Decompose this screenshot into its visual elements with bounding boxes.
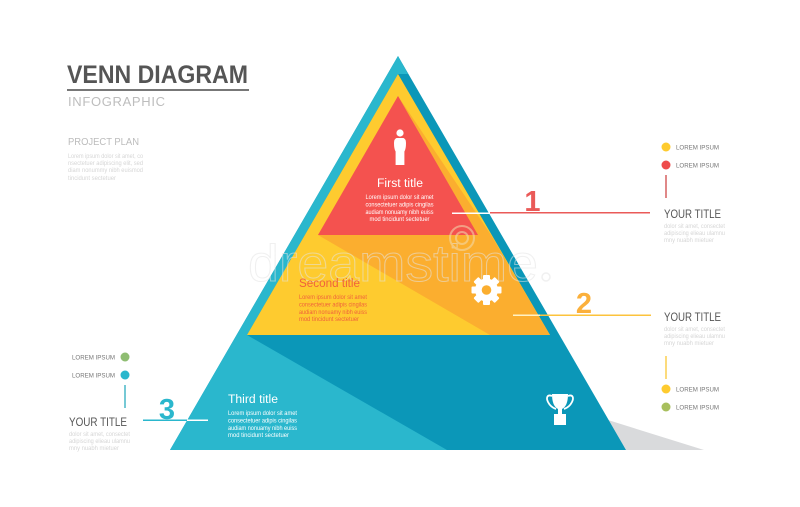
text block: your title 3: adipiscing elieau ulamnu: [69, 439, 130, 445]
text block: project plan: PROJECT PLAN: [68, 136, 139, 148]
legend: top right: LOREM IPSUM: [676, 144, 719, 152]
text block: your title 1: adipiscing elieau ulamnu: [664, 231, 725, 237]
subheading: Infographic: INFOGRAPHIC: [68, 94, 165, 109]
legend: left: [72, 352, 130, 408]
text block: second title: mod tincidunt sectetuer: [299, 317, 359, 323]
pyramid shadow: [608, 420, 704, 450]
text block: your title 1: YOUR TITLE: [664, 207, 721, 221]
icon: gear: [472, 275, 502, 305]
text block: first title: Lorem ipsum dolor sit amet: [366, 195, 434, 201]
text block: first title: [366, 178, 434, 223]
text block: third title: Third title: [228, 394, 278, 406]
text block: third title: [228, 394, 297, 439]
legend: top right: LOREM IPSUM: [676, 162, 719, 170]
legend: lower right: LOREM IPSUM: [676, 404, 719, 412]
callout 3: leader line and number: 3: [159, 394, 175, 426]
text block: your title 3: [69, 415, 130, 452]
text block: third title: Lorem ipsum dolor sit amet: [228, 411, 297, 417]
legend: top right: [662, 142, 719, 198]
text block: your title 1: dolor sit amet, consectet: [664, 224, 725, 230]
text block: third title: audiam nonuamy nibh euiss: [228, 426, 297, 432]
legend: left: LOREM IPSUM: [72, 354, 115, 362]
text block: your title 2: dolor sit amet, consectet: [664, 327, 725, 333]
text block: third title: consectetuer adipis cingilas: [228, 418, 297, 424]
callout 1: leader line and number: 1: [524, 186, 541, 218]
legend: left: LOREM IPSUM: [72, 372, 115, 380]
text block: your title 2: adipiscing elieau ulamnu: [664, 334, 725, 340]
text block: your title 1: mny nuabh mietuer: [664, 238, 714, 244]
text block: first title: mod tincidunt sectetuer: [370, 217, 430, 223]
legend: lower right: LOREM IPSUM: [676, 386, 719, 394]
pyramid level 2: yellow: [247, 74, 550, 335]
text block: first title: consectetuer adipis cingilas: [366, 202, 434, 208]
watermark: dreamstime: [248, 235, 538, 293]
text block: second title: Second title: [299, 278, 360, 290]
text block: second title: [299, 278, 367, 323]
callout 3: leader line and number: [143, 394, 208, 426]
pyramid level 1: red: [318, 96, 478, 235]
text block: third title: mod tincidunt sectetuer: [228, 433, 289, 439]
text block: second title: audiam nonuamy nibh euiss: [299, 310, 367, 316]
pyramid level 3: teal: [170, 56, 626, 450]
text block: project plan: tincidunt sectetuer: [68, 176, 116, 182]
icon: person: [394, 129, 406, 165]
text block: your title 2: [664, 310, 725, 347]
text block: first title: First title: [377, 178, 423, 190]
text block: project plan: nsectetuer adipiscing elit, sed: [68, 161, 143, 167]
text block: your title 1: [664, 207, 725, 244]
icon: trophy: [547, 394, 573, 425]
heading: Venn Diagram: VENN DIAGRAM: [67, 61, 248, 89]
callout 2: leader line and number: 2: [576, 288, 592, 320]
text block: your title 3: dolor sit amet, consectet: [69, 432, 130, 438]
text block: first title: audiam nonuamy nibh euiss: [366, 210, 434, 216]
title block: [67, 61, 249, 109]
legend: lower right: [662, 356, 719, 412]
callout 2: leader line and number: [513, 288, 651, 320]
text block: second title: Lorem ipsum dolor sit amet: [299, 295, 367, 301]
text block: project plan: diam nonummy nibh euismod: [68, 168, 143, 174]
text block: project plan: Lorem ipsum dolor sit amet, co: [68, 154, 144, 160]
text block: your title 2: mny nuabh mietuer: [664, 341, 714, 347]
text block: second title: consectetuer adipis cingilas: [299, 302, 367, 308]
text block: your title 3: YOUR TITLE: [69, 415, 127, 429]
text block: project plan: [68, 136, 144, 182]
text block: your title 3: mny nuabh mietuer: [69, 446, 119, 452]
text block: your title 2: YOUR TITLE: [664, 310, 721, 324]
